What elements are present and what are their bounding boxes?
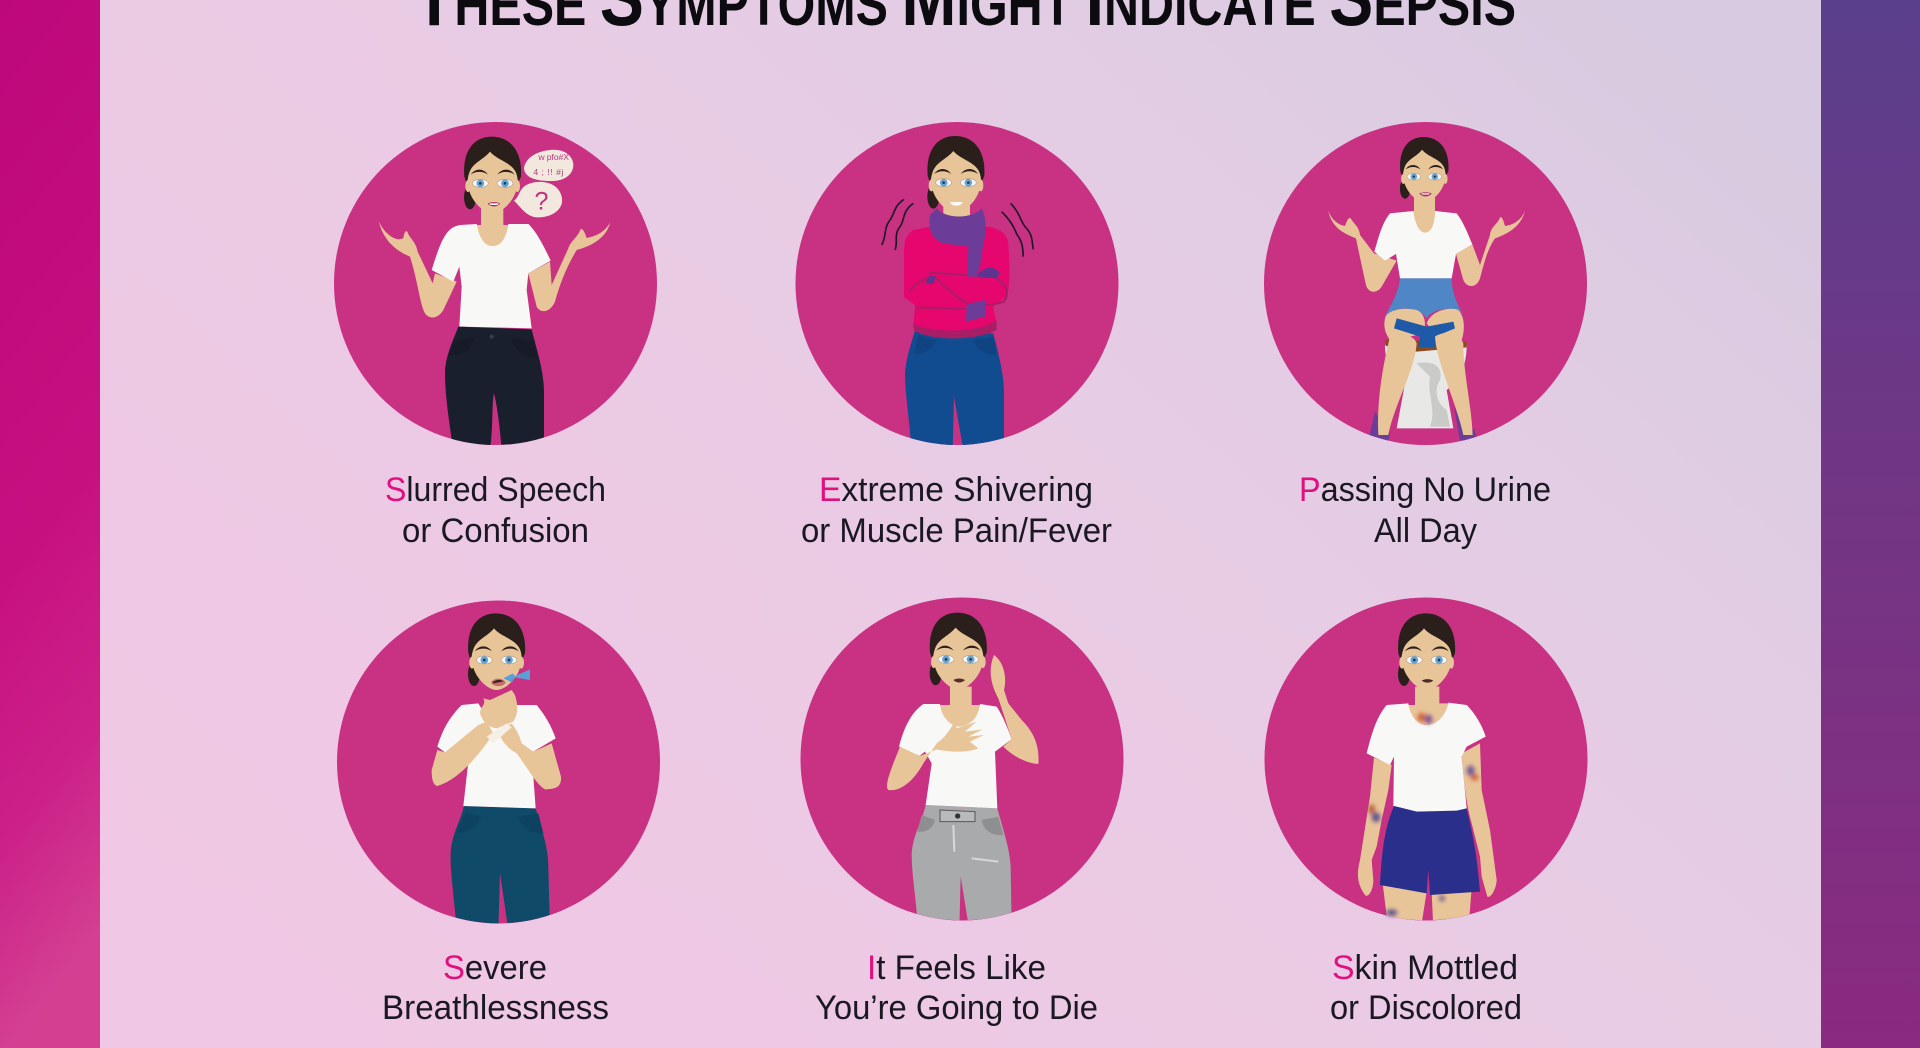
label second line: Breathlessness xyxy=(382,989,609,1027)
label second line: All Day xyxy=(1374,512,1477,550)
figure: woman with bruised skin xyxy=(1358,613,1497,930)
label: Severe xyxy=(443,949,547,987)
label: Extreme Shivering xyxy=(819,471,1093,509)
panel: passing no urine xyxy=(1264,122,1587,550)
icon: question mark thought bubble xyxy=(514,182,562,217)
circle background xyxy=(800,598,1124,920)
icon: breath arrow xyxy=(503,669,530,682)
label second line: You’re Going to Die xyxy=(815,989,1098,1027)
figure: woman seated on toilet xyxy=(1328,137,1525,443)
icon: left shiver lines xyxy=(882,199,913,250)
circle background xyxy=(337,600,660,924)
label: Slurred Speech xyxy=(385,471,606,509)
icon: question mark thought bubble: ? xyxy=(534,187,548,215)
icon: jumbled text thought bubble xyxy=(524,150,573,181)
icon: jumbled text thought bubble: 4 ; !! #j xyxy=(533,167,563,177)
panel: skin mottled xyxy=(1264,598,1588,1027)
label second line: or Confusion xyxy=(402,512,589,550)
panel: severe breathlessness xyxy=(337,600,660,1027)
label: It Feels Like xyxy=(867,949,1046,987)
circle background xyxy=(1264,122,1587,445)
left gradient band xyxy=(0,0,100,1048)
right gradient band xyxy=(1821,0,1920,1048)
figure: woman with hand on chest and head xyxy=(887,613,1039,930)
circle background xyxy=(796,122,1118,445)
circle background xyxy=(1264,598,1588,920)
label second line: or Muscle Pain/Fever xyxy=(801,512,1112,550)
figure: shivering woman in scarf xyxy=(904,136,1009,450)
icon: right shiver lines xyxy=(1002,203,1033,257)
figure: confused woman xyxy=(379,137,610,450)
label: Skin Mottled xyxy=(1332,949,1518,987)
panel: it feels like you're going to die xyxy=(800,598,1124,1027)
icon: bruises xyxy=(1368,713,1479,916)
panel: extreme shivering xyxy=(796,122,1118,550)
circle background xyxy=(334,122,657,445)
panel: slurred speech xyxy=(334,122,657,550)
label second line: or Discolored xyxy=(1330,989,1522,1027)
label: Passing No Urine xyxy=(1299,471,1551,509)
figure: woman clutching throat xyxy=(432,613,561,930)
icon: jumbled text thought bubble: w pfo#X xyxy=(537,152,569,162)
